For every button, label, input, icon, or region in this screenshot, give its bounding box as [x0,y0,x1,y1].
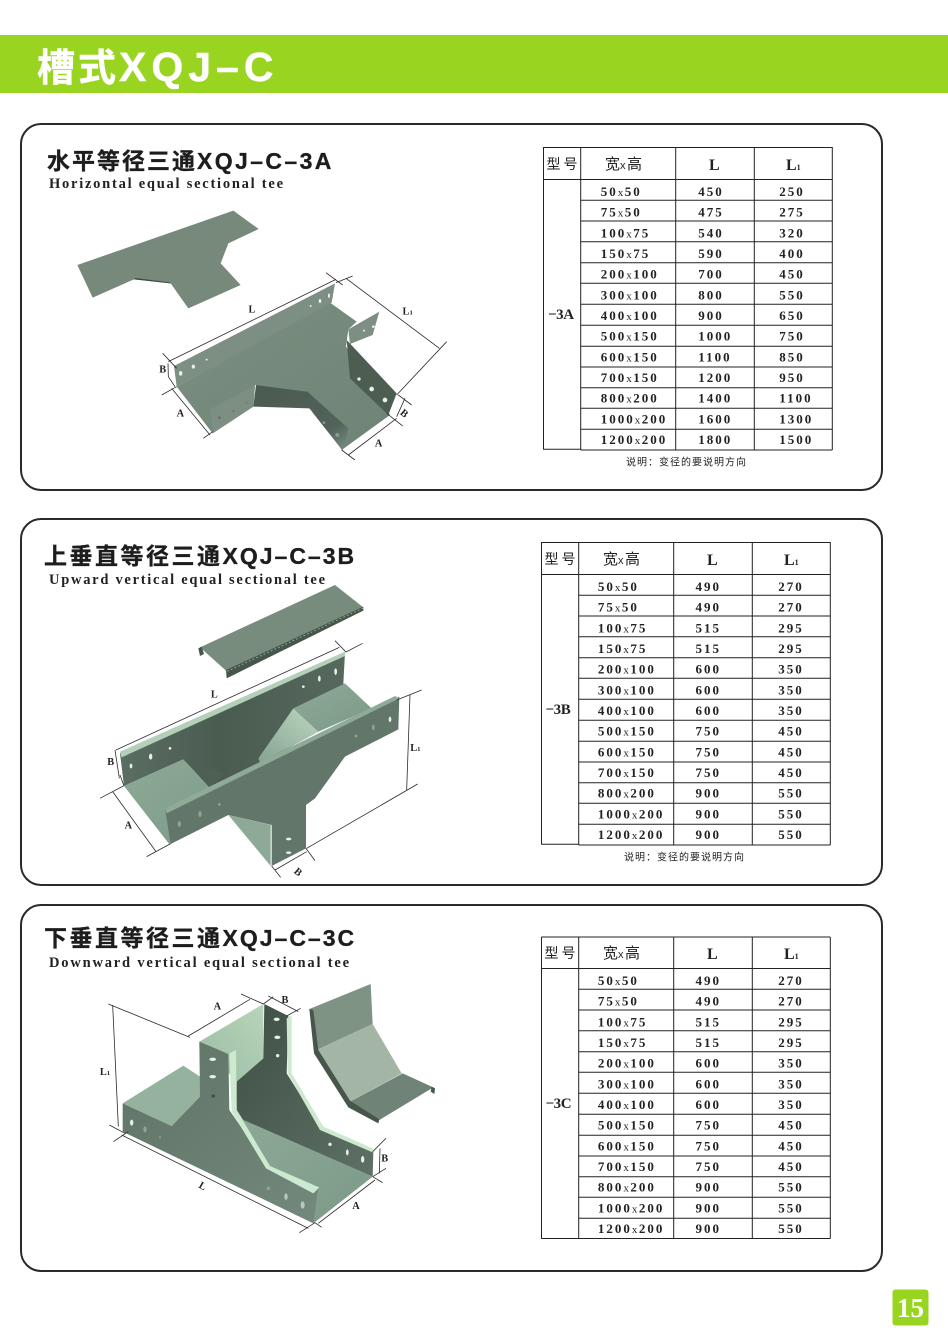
table rows 3A: 320 [779,225,805,240]
table rows 3A: 500x150 [601,329,659,344]
table rows 3A: 300x100 [601,287,659,302]
table rows 3B: 900 [695,827,721,842]
table rows 3C: 1000x200 [598,1200,664,1215]
dimension lines [162,273,447,460]
table rows 3C: 1200x200 [598,1221,664,1236]
table 3B: 号 [562,551,576,567]
table rows 3A: 1000 [698,329,732,344]
table rows 3A: 400 [779,246,805,261]
dimension labels: L [211,689,218,700]
table rows 3A: 50x50 [601,184,642,199]
table rows 3A: 100x75 [601,225,650,240]
table rows 3B: 295 [778,620,804,635]
dimension labels: L1 [100,1067,110,1078]
table rows 3C: 515 [695,1035,721,1050]
panel: horizontal tee 3A [21,124,882,490]
dimension labels: A [375,439,383,450]
heading 3C: 下垂直等径三通XQJ–C–3C [44,925,356,951]
table rows 3C: 550 [778,1200,804,1215]
table rows 3A: 200x100 [601,267,659,282]
dimension labels: B [381,1154,388,1165]
table rows 3B: 300x100 [598,682,656,697]
table rows 3C: 600 [695,1056,721,1071]
table rows 3B: 450 [778,744,804,759]
dimension labels: B [398,408,410,420]
table rows 3A: 800x200 [601,391,659,406]
cover plate [309,984,435,1123]
dimension labels: A [125,821,133,832]
diagram: downward tee [100,984,435,1233]
table rows 3A: 540 [698,225,724,240]
header band [0,35,948,93]
table rows 3C: 270 [778,994,804,1009]
table rows 3B: 600x150 [598,744,656,759]
heading 3B: 上垂直等径三通XQJ–C–3B [44,543,356,569]
table rows 3C: 350 [778,1097,804,1112]
table rows 3C: 490 [695,973,721,988]
subheading 3B: Upward vertical equal sectional tee [49,572,326,588]
main title: 槽式XQJ–C [37,44,278,90]
table rows 3A: 700 [698,267,724,282]
table rows 3C: 450 [778,1138,804,1153]
table rows 3A: 1200 [698,370,732,385]
table note 3A: 说明：变径的要说明方向 [626,456,746,469]
table rows 3C: 750 [695,1159,721,1174]
table rows 3C: 750 [695,1118,721,1133]
heading 3A: 水平等径三通XQJ–C–3A [47,148,334,174]
dimension lines [100,641,422,877]
table rows 3C: 550 [778,1180,804,1195]
table rows 3C: 350 [778,1076,804,1091]
table rows 3B: 750 [695,744,721,759]
table rows 3B: 350 [778,682,804,697]
table rows 3A: 850 [779,349,805,364]
table 3B: L1 [784,552,799,569]
table 3B: −3B [546,702,571,718]
table rows 3C: 900 [695,1221,721,1236]
table rows 3C: 350 [778,1056,804,1071]
dimension labels: A [177,408,185,419]
cover plate [77,211,259,308]
table rows 3A: 1400 [698,391,732,406]
table rows 3B: 1200x200 [598,827,664,842]
table rows 3A: 400x100 [601,308,659,323]
dimension labels: B [107,757,114,768]
dimension labels [159,305,413,450]
table rows 3B: 100x75 [598,620,647,635]
table rows 3B: 600 [695,662,721,677]
table rows 3B: 400x100 [598,703,656,718]
table 3B: L [707,552,718,569]
table rows 3C: 270 [778,973,804,988]
table rows 3C: 50x50 [598,973,639,988]
dimension labels: L [197,1180,208,1193]
diagram: upward tee [100,585,422,879]
table rows 3A: 1800 [698,432,732,447]
table rows 3C: 515 [695,1014,721,1029]
table 3C: 号 [562,945,576,961]
table rows 3A: 75x50 [601,205,642,220]
panel: downward vertical tee 3C [21,905,882,1271]
table rows 3A: 650 [779,308,805,323]
table rows 3C: 75x50 [598,994,639,1009]
table rows 3B: 515 [695,620,721,635]
cover plate [198,585,363,678]
table rows 3B: 600 [695,703,721,718]
table 3A: 号 [564,156,578,172]
table rows 3C: 800x200 [598,1180,656,1195]
tray body [123,1004,373,1223]
table rows 3A: 700x150 [601,370,659,385]
dimension labels: L1 [410,743,420,754]
table rows 3C: 600 [695,1097,721,1112]
table rows 3A: 550 [779,287,805,302]
table 3B [541,542,830,864]
table rows 3A [601,184,813,447]
diagram: horizontal tee [77,211,447,460]
table rows 3B: 800x200 [598,786,656,801]
table 3B: 型 [544,551,558,567]
table rows 3B: 1000x200 [598,806,664,821]
table rows 3B: 550 [778,827,804,842]
dimension labels: A [214,1002,222,1013]
table rows 3A: 1100 [698,349,732,364]
table rows 3A: 1600 [698,411,732,426]
table rows 3C: 550 [778,1221,804,1236]
table rows 3A: 590 [698,246,724,261]
table rows 3B: 270 [778,579,804,594]
table rows 3B: 900 [695,806,721,821]
table rows 3C: 300x100 [598,1076,656,1091]
table rows 3C: 700x150 [598,1159,656,1174]
table 3A: 宽x高 [605,156,642,173]
table 3A: L1 [786,157,801,174]
table rows 3C: 900 [695,1200,721,1215]
dimension labels: B [282,995,289,1006]
table rows 3B: 200x100 [598,662,656,677]
table rows 3C: 400x100 [598,1097,656,1112]
table rows 3A: 950 [779,370,805,385]
table 3C: −3C [546,1096,571,1112]
table rows 3B: 75x50 [598,600,639,615]
table rows 3C: 295 [778,1014,804,1029]
table rows 3B: 600 [695,682,721,697]
table rows 3B: 490 [695,579,721,594]
tray body [174,283,397,451]
page number badge: 15 [897,1293,924,1323]
dimension labels [100,995,388,1212]
dimension labels: L1 [403,307,413,318]
table rows 3B: 450 [778,765,804,780]
table rows 3B: 900 [695,786,721,801]
table rows 3B: 350 [778,703,804,718]
table rows 3B: 50x50 [598,579,639,594]
table 3C: L [707,946,718,963]
table rows 3B: 295 [778,641,804,656]
dimension labels: B [159,364,166,375]
table rows 3A: 150x75 [601,246,650,261]
dimension lines [108,994,386,1233]
table rows 3B [598,579,804,842]
table note 3B: 说明：变径的要说明方向 [624,851,744,864]
table rows 3B: 550 [778,806,804,821]
table rows 3C: 450 [778,1159,804,1174]
table rows 3B: 500x150 [598,724,656,739]
page number badge [892,1290,928,1326]
table rows 3A: 275 [779,205,805,220]
tray body [120,652,399,866]
table rows 3C: 600x150 [598,1138,656,1153]
table rows 3C: 100x75 [598,1014,647,1029]
table rows 3B: 750 [695,765,721,780]
table 3B: 宽x高 [603,551,640,568]
table rows 3B: 350 [778,662,804,677]
table rows 3A: 800 [698,287,724,302]
table rows 3A: 900 [698,308,724,323]
table rows 3B: 150x75 [598,641,647,656]
table rows 3A: 475 [698,205,724,220]
dimension labels: B [291,866,304,879]
table rows 3B: 490 [695,600,721,615]
table rows 3A: 750 [779,329,805,344]
dimension labels: A [352,1201,360,1212]
table rows 3B: 450 [778,724,804,739]
table rows 3A: 1100 [779,391,813,406]
table 3C [541,937,830,1238]
table rows 3C: 295 [778,1035,804,1050]
table rows 3B: 270 [778,600,804,615]
table rows 3B: 515 [695,641,721,656]
table 3C: 型 [544,945,558,961]
table 3C: 宽x高 [603,945,640,962]
table rows 3C [598,973,804,1236]
table rows 3C: 450 [778,1118,804,1133]
table rows 3B: 550 [778,786,804,801]
table rows 3B: 700x150 [598,765,656,780]
table 3C: L1 [784,946,799,963]
dimension labels: L [249,305,256,316]
table 3A: −3A [548,307,574,323]
table 3A: L [709,157,720,174]
dimension labels [107,689,420,879]
table rows 3B: 750 [695,724,721,739]
table rows 3A: 450 [698,184,724,199]
table rows 3A: 450 [779,267,805,282]
table 3A: 型 [546,156,560,172]
table rows 3A: 1300 [779,411,813,426]
subheading 3A: Horizontal equal sectional tee [49,176,284,192]
table rows 3A: 250 [779,184,805,199]
table rows 3A: 1200x200 [601,432,667,447]
table 3A [543,147,832,469]
table rows 3A: 1000x200 [601,411,667,426]
subheading 3C: Downward vertical equal sectional tee [49,955,350,971]
panel: upward vertical tee 3B [21,519,882,885]
table rows 3C: 200x100 [598,1056,656,1071]
table rows 3C: 600 [695,1076,721,1091]
table rows 3C: 150x75 [598,1035,647,1050]
table rows 3A: 600x150 [601,349,659,364]
table rows 3A: 1500 [779,432,813,447]
table rows 3C: 490 [695,994,721,1009]
table rows 3C: 750 [695,1138,721,1153]
table rows 3C: 900 [695,1180,721,1195]
table rows 3C: 500x150 [598,1118,656,1133]
